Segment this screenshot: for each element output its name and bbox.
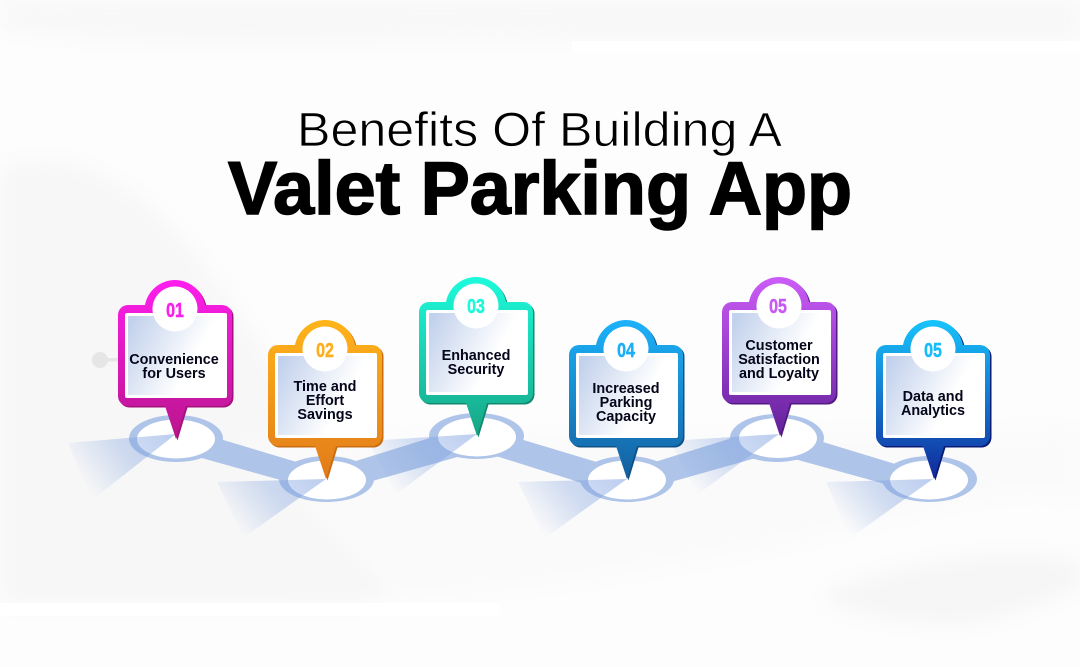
label: Data and Analytics: Data and	[903, 389, 963, 405]
label: Data and Analytics: Analytics	[901, 403, 965, 419]
number 04: 04	[617, 339, 635, 361]
title	[228, 104, 852, 230]
label: Customer Satisfaction and Loyalty: Customer	[745, 338, 813, 354]
pin 4	[569, 320, 684, 480]
heading line 1: Benefits Of Building A	[297, 104, 782, 157]
pin 5	[722, 277, 838, 438]
label: Time and Effort Savings: Time and	[294, 379, 356, 395]
path connectors	[180, 424, 925, 495]
label: Time and Effort Savings: Savings	[297, 407, 353, 423]
number 05 (second): 05	[924, 339, 942, 361]
ring 3	[429, 413, 524, 459]
number 02: 02	[316, 339, 334, 361]
ring 1	[129, 415, 223, 462]
number 03: 03	[467, 295, 485, 317]
label: Time and Effort Savings: Effort	[306, 393, 344, 409]
ring 2	[279, 456, 374, 502]
label: Enhanced Security: Security	[448, 362, 504, 378]
ring 6	[882, 456, 977, 502]
label: Increased Parking Capacity: Capacity	[596, 409, 656, 425]
pin 3	[419, 277, 534, 438]
pin 2	[268, 320, 384, 480]
number 05: 05	[769, 295, 787, 317]
heading line 2: Valet Parking App	[228, 146, 852, 230]
location rings	[129, 413, 977, 502]
label: Convenience for Users: for Users	[142, 366, 206, 382]
pin 6	[876, 320, 992, 480]
label: Increased Parking Capacity: Increased	[592, 381, 660, 397]
label: Increased Parking Capacity: Parking	[600, 395, 652, 411]
label: Convenience for Users: Convenience	[129, 352, 219, 368]
ring 4	[580, 456, 674, 502]
label: Enhanced Security: Enhanced	[442, 348, 510, 364]
label: Customer Satisfaction and Loyalty: and Loyalty	[739, 366, 819, 382]
pin 1	[118, 280, 234, 440]
ring 5	[730, 414, 824, 462]
decorative node	[92, 352, 120, 368]
number 01: 01	[166, 299, 184, 321]
light beams	[68, 434, 933, 538]
label: Customer Satisfaction and Loyalty: Satisfaction	[738, 352, 820, 368]
